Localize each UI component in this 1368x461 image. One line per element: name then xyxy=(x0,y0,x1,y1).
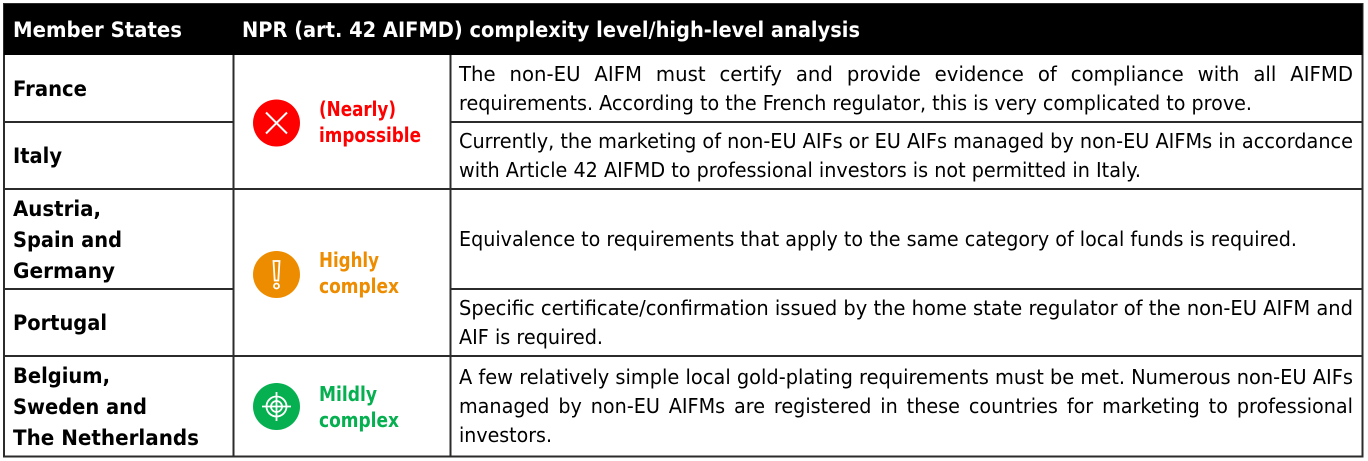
analysis: Portugal xyxy=(459,296,1353,349)
analysis: France: The non-EU AIFM must certify and provide evidence of compliance with all AIFMD xyxy=(458,62,1353,86)
icon: green circle with target xyxy=(253,383,300,430)
analysis: Italy xyxy=(459,129,1353,182)
label: Mildly complex: complex xyxy=(319,408,399,432)
state: Italy: Italy xyxy=(13,144,62,168)
column: analysis xyxy=(458,62,1353,447)
state: Portugal: Portugal xyxy=(13,311,107,335)
complexity: nearly impossible xyxy=(253,97,421,147)
icon: red circle with cross xyxy=(253,100,300,146)
header row xyxy=(4,4,1362,55)
analysis: France xyxy=(458,62,1353,115)
label: (Nearly) impossible xyxy=(319,97,421,147)
states: Austria, Spain and Germany: Spain and xyxy=(13,228,122,252)
icon: orange circle with exclamation mark xyxy=(253,251,300,298)
states: Belgium, Sweden and The Netherlands: Sweden and xyxy=(13,395,147,419)
analysis: France: requirements. According to the French regulator, this is very complicated to prove. xyxy=(459,91,1252,115)
states: Belgium, Sweden and The Netherlands: The Netherlands xyxy=(13,426,199,450)
states: Austria, Spain and Germany: Austria, xyxy=(13,197,101,221)
analysis: Austria, Spain and Germany: Equivalence to requirements that apply to the same category of local funds is required. xyxy=(459,227,1297,251)
label: Highly complex: complex xyxy=(319,274,399,298)
states: Austria, Spain and Germany xyxy=(13,197,122,283)
label: Highly complex: Highly xyxy=(319,248,379,272)
analysis: Italy: with Article 42 AIFMD to professional investors is not permitted in Italy. xyxy=(459,158,1141,182)
states: Belgium, Sweden and The Netherlands: Belgium, xyxy=(13,364,110,388)
label: Mildly complex xyxy=(319,382,399,432)
label: (Nearly) impossible: (Nearly) xyxy=(319,97,396,121)
states: Austria, Spain and Germany: Germany xyxy=(13,259,115,283)
label: Mildly complex: Mildly xyxy=(319,382,377,406)
complexity: mildly complex xyxy=(253,382,399,432)
states: Belgium, Sweden and The Netherlands xyxy=(13,364,199,450)
complexity: highly complex xyxy=(253,248,399,298)
state: France: France xyxy=(13,77,87,101)
header: Member States: Member States xyxy=(13,18,182,43)
analysis: Belgium, Sweden and The Netherlands xyxy=(459,365,1353,447)
header: analysis: NPR (art. 42 AIFMD) complexity level/high-level analysis xyxy=(242,18,860,43)
analysis: Belgium, Sweden and The Netherlands: investors. xyxy=(459,423,552,447)
column: Member States xyxy=(13,77,199,450)
analysis: Portugal: AIF is required. xyxy=(459,325,603,349)
label: (Nearly) impossible: impossible xyxy=(319,123,421,147)
label: Highly complex xyxy=(319,248,399,298)
